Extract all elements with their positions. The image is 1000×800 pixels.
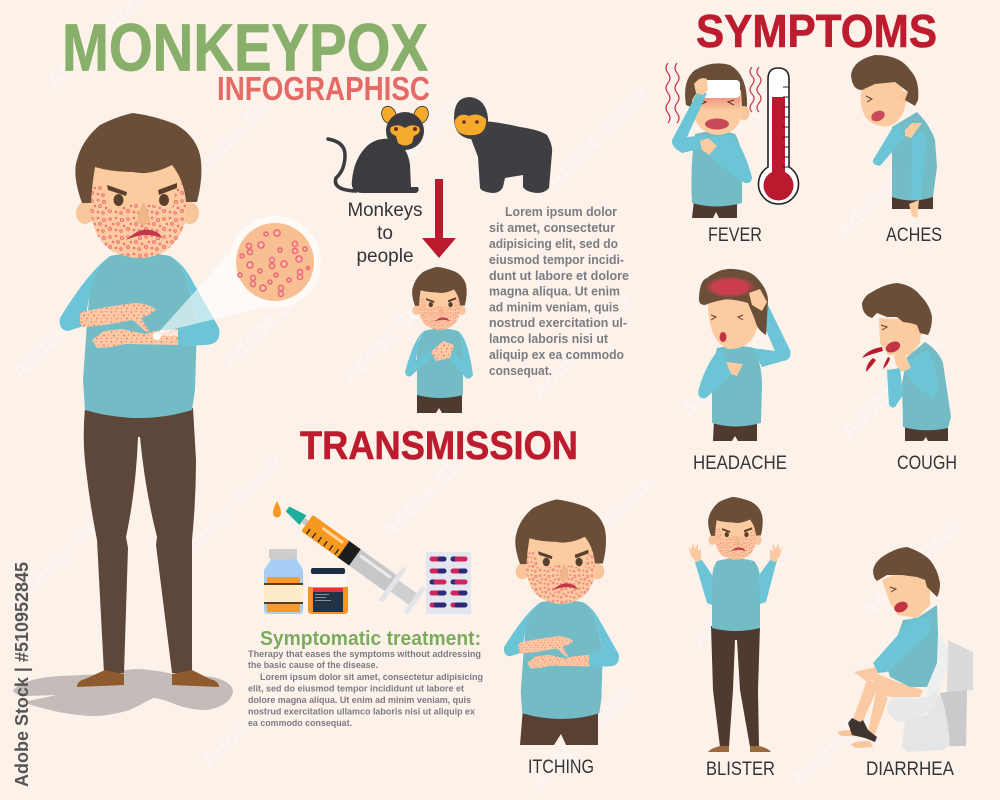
orange chamber [301, 515, 349, 557]
face [708, 298, 758, 349]
raised arm [873, 125, 905, 166]
treatment body text: Therapy that eases the symptoms without addressing [248, 649, 481, 660]
label stripes [264, 583, 303, 604]
trousers [520, 708, 598, 745]
feet [837, 730, 873, 748]
body [470, 120, 552, 193]
label: fever: FEVER [708, 225, 762, 246]
label: aches: ACHES [886, 225, 942, 246]
bottle glass [264, 558, 303, 614]
magnified blisters [238, 230, 310, 296]
torso [712, 346, 762, 426]
bottle label [264, 583, 303, 603]
transmission body text [489, 205, 629, 378]
arrow: monkeys to people [422, 179, 456, 258]
stock watermarks: Adobe Stock [356, 90, 469, 204]
transmission body text: lamco laboris nisi ut [489, 332, 609, 346]
eye closed [890, 587, 896, 592]
raised arm [672, 93, 707, 153]
needle [273, 498, 293, 513]
ear [915, 325, 925, 335]
stock watermarks: Adobe Stock [196, 660, 309, 774]
cough figure [862, 283, 951, 441]
face mask [390, 125, 420, 146]
eyes [394, 127, 417, 131]
transmission body text: magna aliqua. Ut enim [489, 284, 620, 298]
stock watermarks: Adobe Stock [186, 70, 299, 184]
thermometer [759, 68, 799, 204]
mercury [764, 97, 794, 201]
transmission body text: eiusmod tempor incidi- [489, 253, 624, 267]
stock watermarks: Adobe Stock [676, 310, 789, 424]
stock watermarks: Adobe Stock [176, 450, 289, 564]
gorilla [454, 97, 552, 193]
lowered trousers [848, 718, 877, 742]
trousers [905, 425, 948, 441]
bottle liquid [267, 577, 300, 612]
itching figure [504, 499, 619, 745]
rash-covered head [412, 267, 467, 330]
stock watermarks: Adobe Stock [541, 80, 654, 194]
jar glass [308, 574, 348, 614]
transmission body text: aliquip ex ea commodo [489, 348, 624, 362]
head [454, 97, 488, 139]
end flange [403, 586, 426, 615]
shoes [77, 670, 219, 687]
transmission body text: Lorem ipsum dolor [505, 205, 617, 219]
toilet bowl [887, 687, 940, 722]
mouth [884, 339, 902, 355]
finger flange [378, 566, 407, 603]
treatment body text: Lorem ipsum dolor sit amet, consectetur adipisicing [260, 672, 483, 683]
open mouth [705, 118, 729, 130]
transmission body text: sit amet, consectetur [489, 221, 615, 235]
subtitle: infographisc: INFOGRAPHISC [217, 70, 430, 107]
trousers [84, 408, 196, 673]
fever flush [697, 96, 740, 110]
transmission body text: nostrud exercitation ul- [489, 316, 627, 330]
medicine jar [308, 568, 348, 614]
trousers [692, 200, 737, 218]
mouth [870, 109, 886, 123]
diarrhea figure [837, 547, 973, 752]
stock watermarks: Adobe Stock [836, 330, 949, 444]
face [455, 115, 486, 135]
treatment body text [248, 649, 483, 729]
ear [738, 106, 750, 120]
ground shadow [13, 669, 233, 716]
black band [337, 541, 361, 566]
toilet tank [947, 640, 973, 693]
raised hands [688, 543, 783, 562]
shoes [708, 746, 771, 752]
stock watermarks: Adobe Stock [686, 540, 799, 654]
capsules [432, 559, 465, 605]
stock watermarks: Adobe Stock [856, 510, 969, 624]
hanging arm [911, 131, 926, 200]
tip connector [301, 518, 310, 526]
trousers [711, 626, 760, 747]
scale ticks [783, 87, 789, 167]
hair [685, 63, 747, 108]
hands [694, 78, 717, 155]
stock watermarks: Adobe Stock [16, 490, 129, 604]
torso [691, 131, 742, 206]
stock watermarks: Adobe Stock [526, 290, 639, 404]
jar label [313, 588, 343, 612]
light beam [156, 238, 273, 335]
heading: symptoms: SYMPTOMS [696, 5, 937, 57]
hands [726, 289, 767, 376]
cold compress [702, 80, 740, 98]
medicine drop [273, 501, 281, 518]
head [515, 499, 606, 604]
hand [894, 354, 911, 372]
base shadow [940, 690, 967, 746]
heading: symptomatic treatment: Symptomatic treatment: [260, 628, 481, 650]
eyes closed [700, 100, 734, 105]
mouth [893, 600, 909, 614]
head [708, 497, 763, 560]
torso [712, 558, 760, 631]
rash-covered head [75, 113, 201, 258]
stock watermarks: Adobe Stock [336, 275, 449, 389]
lowered arm [703, 134, 752, 183]
head pain glow [704, 276, 756, 298]
transmission body text: dunt ut labore et dolore [489, 269, 629, 283]
arm [873, 617, 932, 673]
label: headache: HEADACHE [693, 453, 787, 474]
treatment body text: dolore magna aliqua. Ut enim ad minim veniam, quis [248, 695, 471, 706]
stock watermarks: Adobe Stock [831, 130, 944, 244]
barrel highlight [359, 554, 392, 579]
shins [852, 680, 888, 735]
toilet base [902, 690, 967, 752]
stock watermarks: Adobe Stock [216, 260, 329, 374]
head [386, 112, 424, 150]
body [352, 139, 419, 193]
label: monkeys to people: Monkeys [348, 200, 422, 221]
arms [695, 560, 777, 605]
small rash figure [405, 267, 473, 413]
treatment body text: nostrud exercitation ullamco laboris nisi ut aliquip ex [248, 706, 476, 718]
treatment body text: the basic cause of the disease. [248, 660, 378, 671]
label: cough: COUGH [897, 453, 957, 474]
transmission body text: adipisicing elit, sed do [489, 237, 618, 251]
arms crossed [405, 331, 473, 379]
stock watermarks: Adobe Stock [6, 270, 119, 384]
treatment body text: elit, sed do eiusmod tempor incididunt ut labore et [248, 684, 465, 694]
torso [892, 112, 937, 200]
stock watermarks: Adobe Stock [526, 680, 639, 794]
jar cap [311, 568, 345, 574]
trousers [713, 420, 757, 441]
treatment body text: ea commodo consequat. [248, 718, 352, 729]
stock watermarks: Adobe Stock [376, 430, 489, 544]
hair [699, 269, 768, 335]
label: diarrhea: DIARRHEA [866, 759, 954, 780]
transmission body text: consequat. [489, 364, 552, 378]
hands [905, 123, 922, 218]
lens skin [236, 223, 314, 301]
face [861, 80, 906, 126]
tail [328, 139, 356, 191]
main rash figure [13, 113, 233, 716]
lens on forearm [153, 330, 178, 340]
thermometer glass [759, 68, 799, 204]
face [692, 84, 742, 135]
torso [887, 605, 938, 687]
raised arm [752, 305, 790, 367]
fever figure [666, 63, 761, 218]
magnified skin callout [153, 216, 321, 340]
label: monkeys to people [348, 200, 422, 267]
lens outer ring [229, 216, 321, 308]
trousers [417, 393, 462, 413]
stock image id: Adobe Stock | #510952845 [12, 562, 32, 787]
upper arm [905, 350, 938, 398]
stock watermarks: Adobe Stock [686, 70, 799, 184]
torso [902, 342, 951, 430]
eyes [462, 120, 479, 124]
chamber highlight [321, 526, 344, 544]
stock watermarks: Adobe Stock [546, 470, 659, 584]
trousers [892, 195, 933, 209]
hair [873, 547, 940, 597]
sweater and arms [504, 600, 619, 719]
open mouth [720, 332, 726, 342]
sweater and rash-covered arms [60, 253, 219, 418]
blister figure [688, 497, 783, 752]
ears [379, 104, 431, 126]
label: itching: ITCHING [528, 757, 594, 778]
eyes closed [711, 315, 743, 320]
back arm [887, 368, 903, 408]
rash-covered hands [431, 341, 454, 361]
left arm [698, 348, 735, 398]
toilet lid [925, 633, 948, 699]
monkey [328, 104, 431, 193]
blood spatter [862, 347, 890, 372]
title: monkeypox: MONKEYPOX [62, 10, 428, 86]
plunger shaft [384, 576, 420, 607]
hair [862, 283, 932, 335]
heat waves left [666, 63, 761, 123]
pack foil [426, 552, 471, 614]
stock watermarks: Adobe Stock [786, 680, 899, 794]
headache figure [698, 269, 790, 441]
hair [851, 55, 918, 106]
bottle cap [269, 549, 297, 560]
face [882, 570, 930, 618]
aches figure [851, 55, 937, 218]
heading: transmission: TRANSMISSION [300, 424, 578, 468]
barrel [348, 549, 399, 593]
eye closed [881, 325, 887, 330]
label: monkeys to people: people [356, 246, 414, 267]
hand [854, 667, 880, 682]
sweater [417, 328, 463, 398]
jar liquid [308, 587, 348, 614]
transmission body text: ad minim veniam, quis [489, 300, 619, 314]
face [879, 318, 922, 355]
ear [900, 92, 910, 102]
syringe [261, 481, 429, 619]
jar label text lines [315, 594, 331, 601]
blister pack [426, 552, 471, 614]
label: monkeys to people: to [377, 223, 393, 244]
label: blister: BLISTER [706, 759, 775, 780]
thigh [873, 672, 923, 697]
tick marks [307, 529, 339, 554]
eye closed [866, 96, 872, 102]
needle hub [284, 504, 306, 525]
jar label stripe [313, 588, 343, 592]
medicine bottle [264, 549, 303, 614]
